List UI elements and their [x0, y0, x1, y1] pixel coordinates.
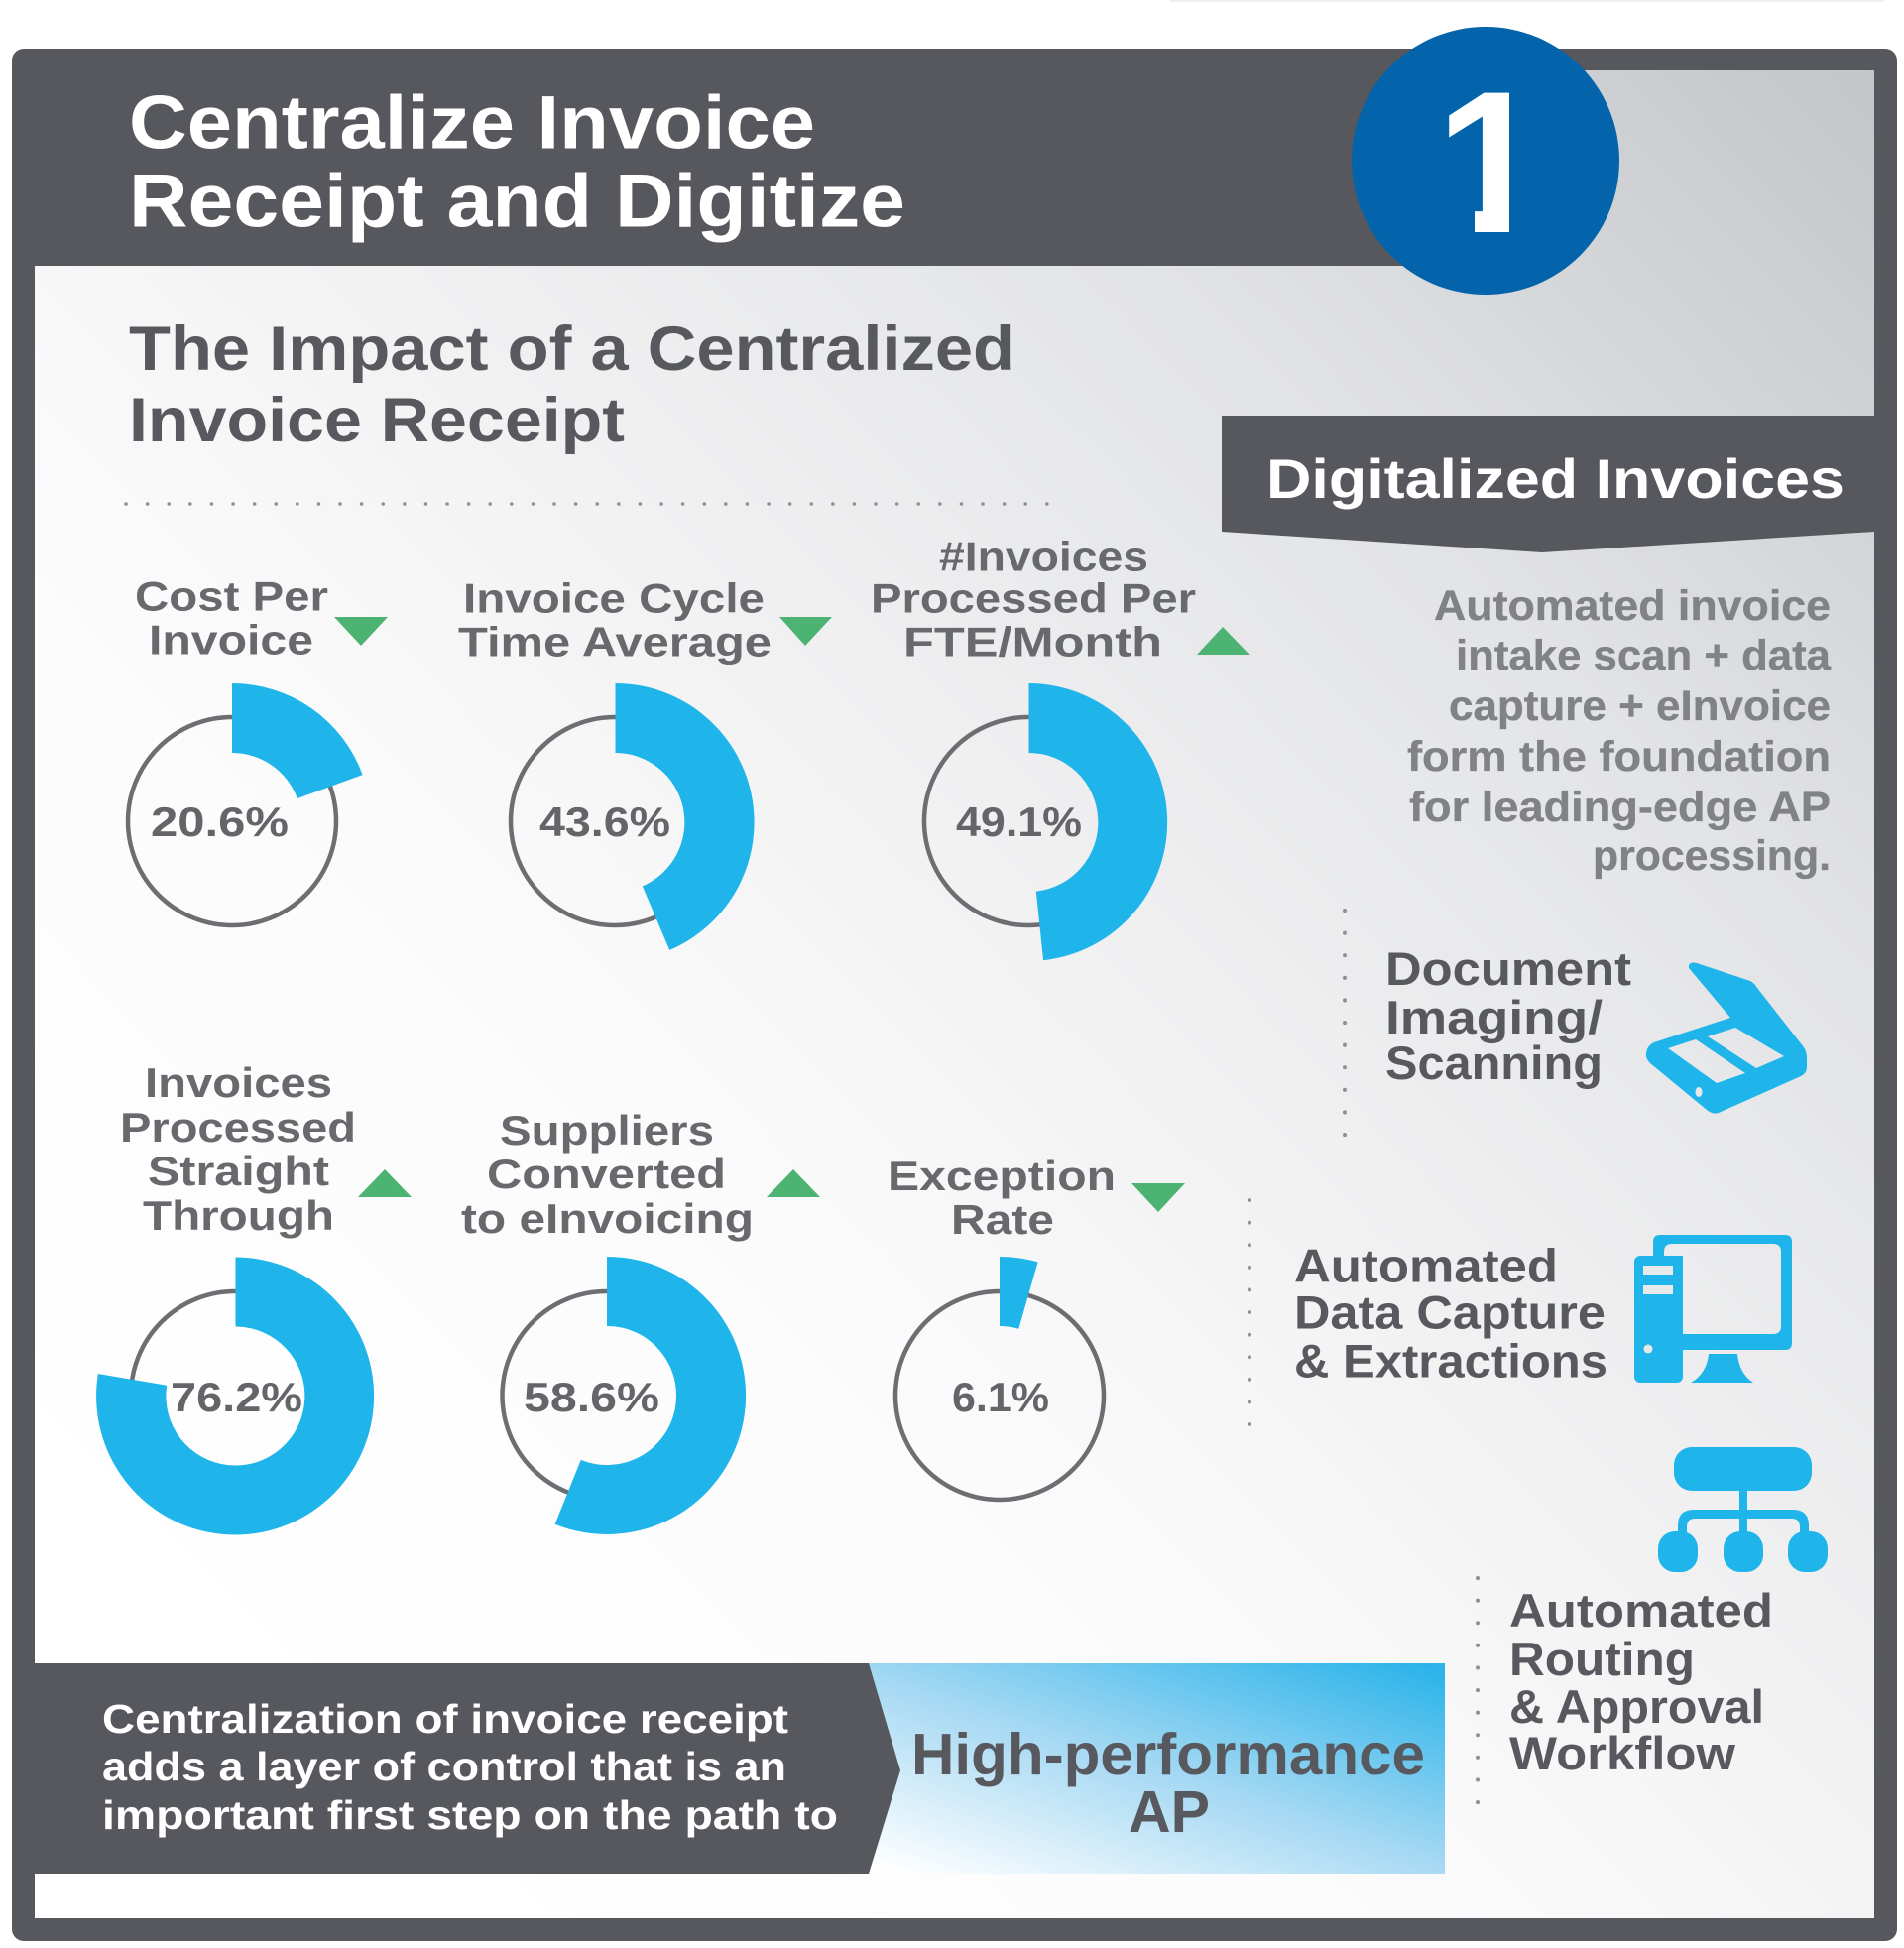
donut chart: [502, 1257, 746, 1534]
callout: high-performance AP: High-performance: [911, 1722, 1425, 1787]
callout: high-performance AP: [867, 1663, 1445, 1874]
metric: suppliers converted: [461, 1107, 820, 1534]
donut chart: [511, 683, 755, 950]
donut chart: [924, 683, 1167, 960]
metric label: Invoice Cycle: [463, 575, 765, 621]
donut chart: 43.6%: [539, 798, 670, 845]
banner: digitalized invoices: Digitalized Invoices: [1266, 447, 1844, 510]
metric label: #Invoices: [939, 534, 1148, 579]
metric label: [871, 534, 1196, 665]
feature label: Scanning: [1385, 1036, 1603, 1089]
callout: high-performance AP: AP: [1129, 1779, 1210, 1845]
icon: up arrow: [358, 1169, 412, 1197]
feature label: Imaging/: [1385, 991, 1603, 1043]
metric label: [135, 573, 328, 663]
metric label: to eInvoicing: [461, 1195, 754, 1242]
metric label: Time Average: [458, 619, 772, 665]
donut chart: 58.6%: [524, 1374, 659, 1420]
icon: step number badge: 1: [1435, 50, 1548, 276]
metric label: [458, 575, 772, 665]
callout: centralization statement: Centralization of invoice receipt: [102, 1696, 788, 1742]
callout: centralization statement: adds a layer of control that is an: [102, 1744, 786, 1789]
icon: scanner: [1646, 963, 1807, 1114]
feature label: [1294, 1240, 1607, 1387]
title: Receipt and Digitize: [129, 159, 905, 244]
metric: exception rate: [888, 1153, 1185, 1500]
donut chart: 49.1%: [956, 798, 1082, 845]
feature label: [1385, 942, 1631, 1089]
metric label: Invoices: [145, 1059, 332, 1106]
feature label: routing and approval: Workflow: [1509, 1727, 1735, 1779]
heading: impact: Invoice Receipt: [129, 386, 625, 455]
title: [129, 81, 905, 244]
text block: digital invoice description: intake scan + data: [1456, 632, 1832, 679]
feature label: Data Capture: [1294, 1285, 1606, 1339]
feature label: routing and approval: & Approval: [1509, 1680, 1764, 1733]
metric label: FTE/Month: [903, 619, 1162, 665]
metric label: Through: [143, 1192, 334, 1239]
feature label: Document: [1385, 942, 1631, 995]
icon: computer: [1634, 1235, 1792, 1383]
feature: document imaging: [1385, 942, 1807, 1114]
text block: digital invoice description: capture + eInvoice: [1449, 682, 1831, 730]
icon: up arrow: [767, 1169, 820, 1197]
metric label: [120, 1059, 356, 1239]
metric label: Invoice: [149, 617, 313, 663]
metric label: Rate: [951, 1196, 1054, 1243]
metric label: Processed Per: [871, 575, 1196, 621]
metric label: Cost Per: [135, 573, 328, 619]
feature label: Automated: [1294, 1240, 1558, 1291]
icon: down arrow: [779, 617, 832, 646]
callout: centralization statement: important first step on the path to: [102, 1792, 838, 1838]
banner: digitalized invoices: [1222, 416, 1874, 552]
metric label: Suppliers: [500, 1107, 714, 1154]
text block: digital invoice description: [1407, 582, 1832, 880]
icon: down arrow: [1131, 1183, 1185, 1212]
text block: digital invoice description: for leading-edge AP: [1409, 784, 1831, 831]
text block: digital invoice description: Automated invoice: [1434, 582, 1831, 630]
icon: up arrow: [1197, 627, 1250, 655]
metric label: Processed: [120, 1104, 356, 1151]
metric: invoice cycle time: [458, 575, 832, 950]
metric label: [461, 1107, 754, 1242]
feature: data capture: [1294, 1235, 1792, 1387]
donut chart: 76.2%: [171, 1374, 302, 1420]
feature label: routing and approval: Automated: [1509, 1584, 1773, 1637]
text block: digital invoice description: processing.: [1593, 832, 1831, 880]
feature label: routing and approval: Routing: [1509, 1633, 1695, 1685]
icon: step number badge: [1352, 27, 1619, 295]
title: Centralize Invoice: [129, 81, 815, 165]
metric: straight through: [96, 1059, 412, 1534]
donut chart: [96, 1258, 374, 1534]
donut chart: [128, 683, 363, 925]
metric label: Converted: [487, 1151, 726, 1197]
callout: centralization statement: [35, 1663, 900, 1874]
metric label: Exception: [888, 1153, 1116, 1199]
icon: down arrow: [334, 617, 388, 646]
metric label: [888, 1153, 1116, 1243]
donut chart: 20.6%: [151, 798, 289, 845]
heading: impact: [129, 314, 1014, 455]
metric: cost per invoice: [128, 573, 388, 925]
heading: impact: The Impact of a Centralized: [129, 314, 1014, 384]
metric: invoices per FTE: [871, 534, 1250, 960]
feature label: routing and approval: [1509, 1584, 1773, 1779]
feature label: & Extractions: [1294, 1335, 1607, 1387]
metric label: Straight: [148, 1148, 329, 1194]
icon: workflow: [1658, 1447, 1828, 1572]
donut chart: [895, 1257, 1104, 1500]
text block: digital invoice description: form the foundation: [1407, 733, 1831, 781]
donut chart: 6.1%: [952, 1374, 1049, 1420]
